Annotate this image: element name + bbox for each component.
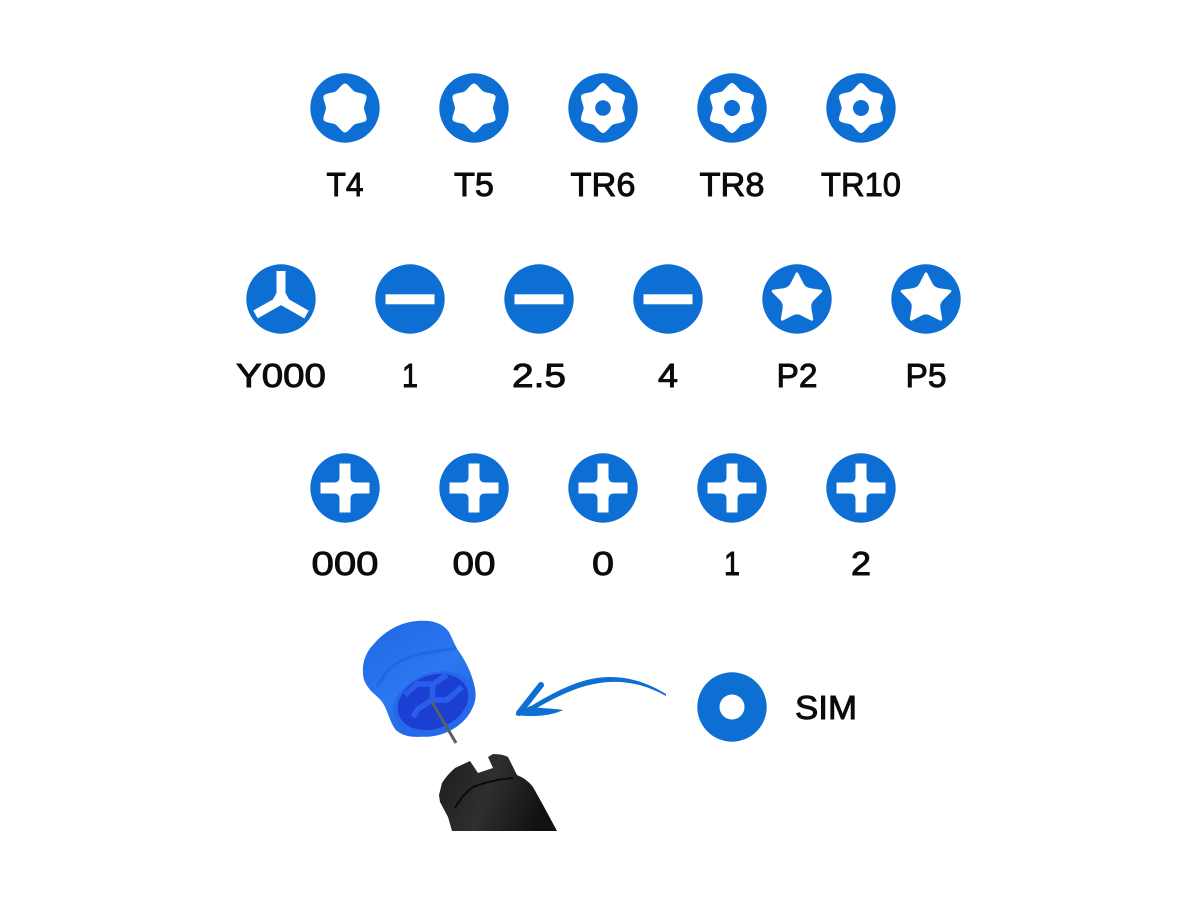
label: 000: 000 bbox=[312, 545, 378, 582]
blue cap bbox=[363, 621, 485, 748]
label: 2: 2 bbox=[851, 545, 871, 582]
driver handle bbox=[439, 754, 557, 831]
icon: SIM pin bit bbox=[697, 672, 767, 742]
icon: Phillips 00 bbox=[439, 453, 509, 523]
label: TR10: TR10 bbox=[821, 166, 901, 203]
icon: T4 torx bbox=[310, 73, 380, 143]
label: 1: 1 bbox=[724, 545, 740, 582]
icon: flat 1 bbox=[375, 264, 445, 334]
label: T4: T4 bbox=[326, 166, 364, 203]
label: 00: 00 bbox=[452, 545, 496, 582]
icon: P5 pentalobe bbox=[891, 264, 961, 334]
row 2: tri-wing, flat and pentalobe bits bbox=[236, 264, 961, 394]
illustration: blue SIM cap, pin and driver handle bbox=[363, 621, 557, 831]
label: 2.5: 2.5 bbox=[512, 357, 566, 394]
icon: Phillips 2 bbox=[826, 453, 896, 523]
icon: Phillips 0 bbox=[568, 453, 638, 523]
icon: Phillips 000 bbox=[310, 453, 380, 523]
label: 0: 0 bbox=[592, 545, 614, 582]
row 3: phillips bits bbox=[310, 453, 896, 582]
icon: TR8 security torx bbox=[697, 73, 767, 143]
metal pin bbox=[432, 702, 456, 743]
icon: flat 4 bbox=[633, 264, 703, 334]
label: Y000: Y000 bbox=[236, 357, 326, 394]
icon: Phillips 1 bbox=[697, 453, 767, 523]
icon: flat 2.5 bbox=[504, 264, 574, 334]
label: TR6: TR6 bbox=[570, 166, 636, 203]
row 1: torx bits bbox=[310, 73, 901, 203]
label: P5: P5 bbox=[906, 357, 946, 394]
label: P2: P2 bbox=[776, 357, 818, 394]
icon: TR6 security torx bbox=[568, 73, 638, 143]
icon: TR10 security torx bbox=[826, 73, 896, 143]
label: SIM: SIM bbox=[795, 689, 857, 726]
label: 4: 4 bbox=[658, 357, 678, 394]
label: TR8: TR8 bbox=[700, 166, 764, 203]
icon: P2 pentalobe bbox=[762, 264, 832, 334]
icon: T5 torx bbox=[439, 73, 509, 143]
icon: Y000 tri-wing bbox=[246, 264, 316, 334]
label: T5: T5 bbox=[454, 166, 494, 203]
label: 1: 1 bbox=[402, 357, 418, 394]
arrow pointing to cap bbox=[515, 677, 666, 716]
